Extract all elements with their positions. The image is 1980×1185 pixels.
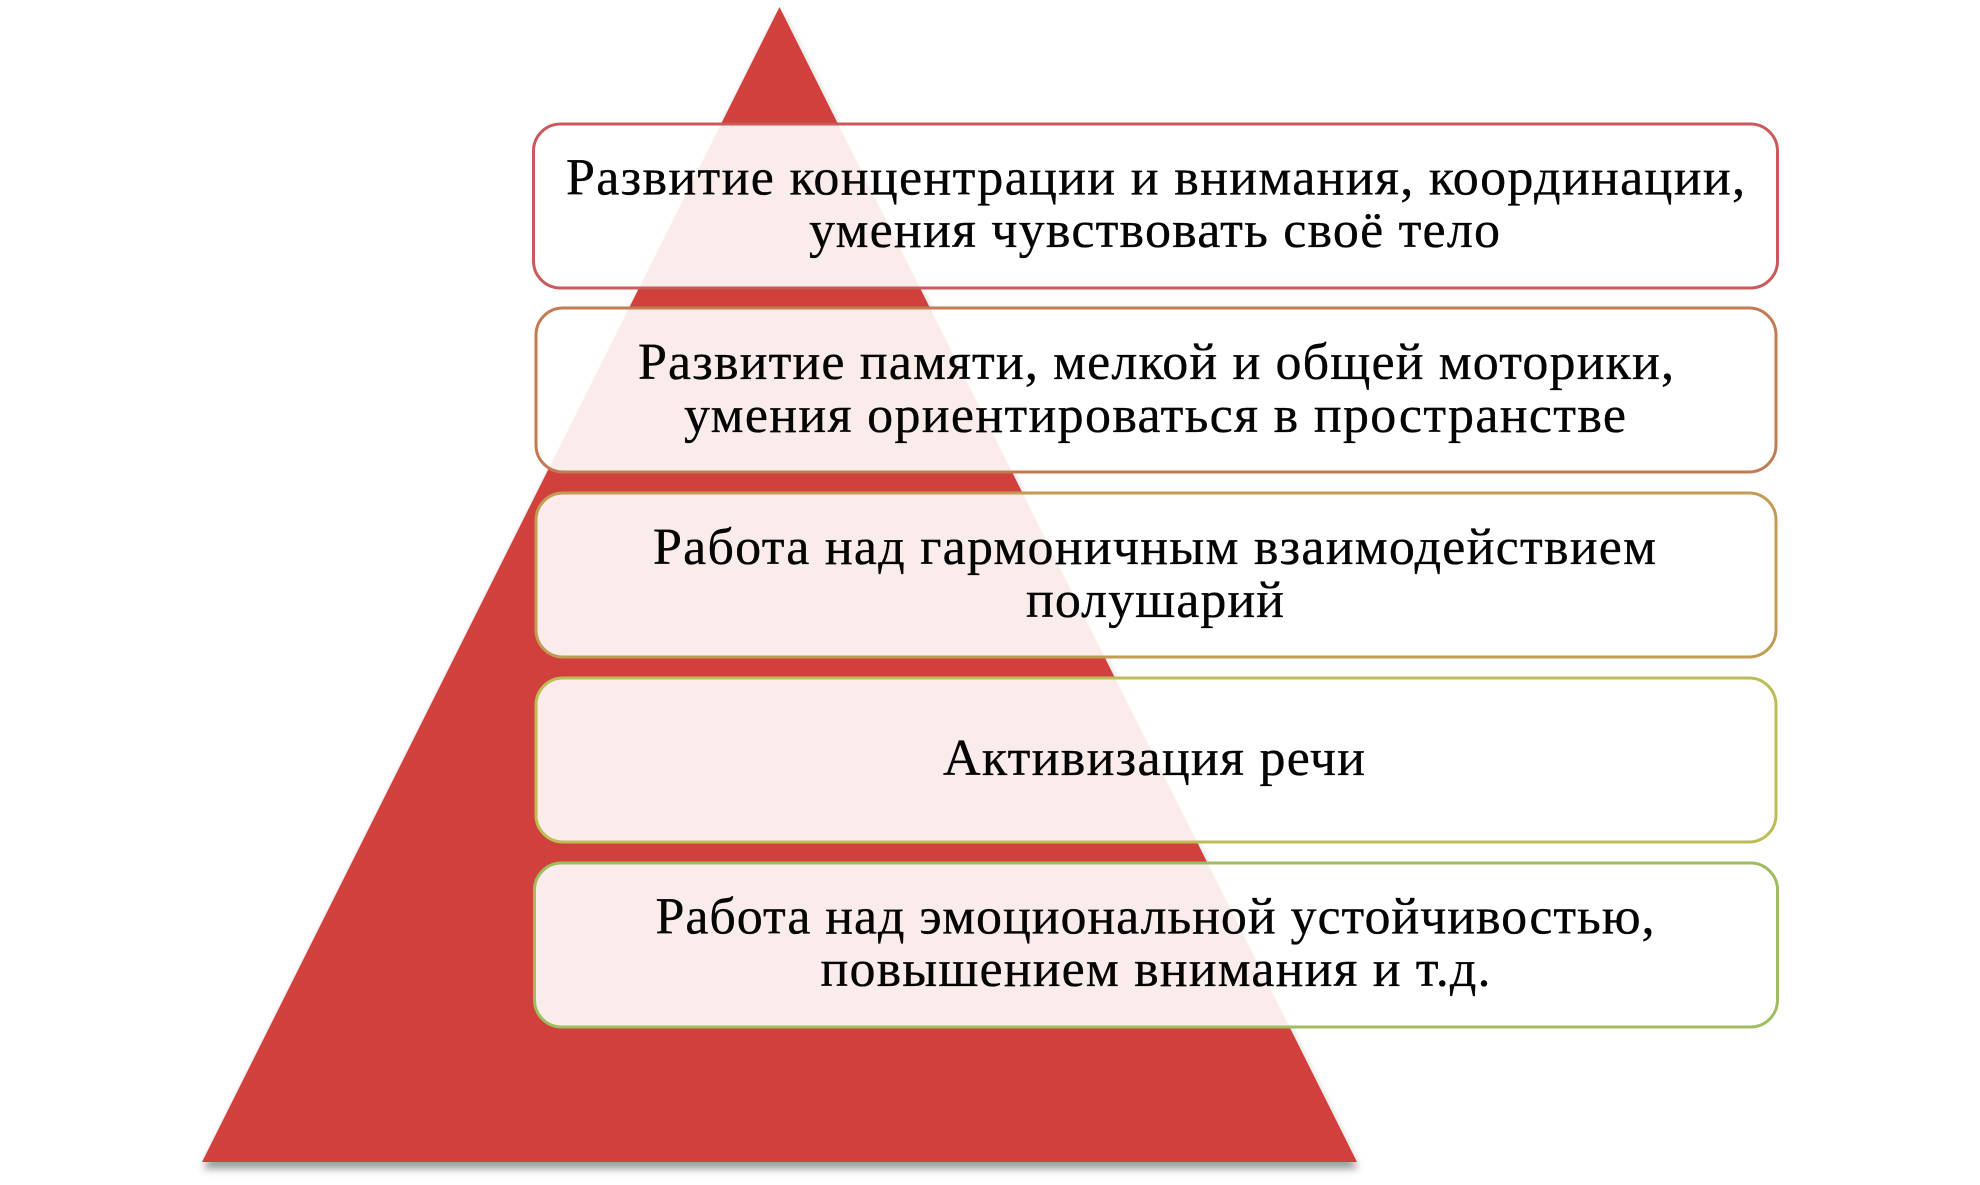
red pyramid triangle xyxy=(202,7,1357,1162)
panel: emotional stability: Работа над эмоциональной устойчивостью, xyxy=(656,888,1654,946)
panel: concentration and attention: умения чувствовать своё тело xyxy=(809,202,1500,259)
panel: hemispheres xyxy=(536,493,1776,657)
panel: concentration and attention: Развитие концентрации и внимания, координации, xyxy=(566,150,1745,206)
panel: speech activation xyxy=(536,678,1776,842)
panel: emotional stability: повышением внимания и т.д. xyxy=(820,941,1490,998)
panel: memory and motor skills: Развитие памяти, мелкой и общей моторики, xyxy=(638,334,1674,391)
panel: concentration and attention xyxy=(534,124,1778,288)
panel: emotional stability xyxy=(534,863,1778,1027)
panel: hemispheres: Работа над гармоничным взаимодействием xyxy=(653,519,1656,576)
panel: speech activation: Активизация речи xyxy=(943,730,1365,787)
panel: hemispheres: полушарий xyxy=(1026,572,1284,629)
panel: memory and motor skills: умения ориентироваться в пространстве xyxy=(684,387,1626,444)
panel: memory and motor skills xyxy=(536,308,1776,472)
